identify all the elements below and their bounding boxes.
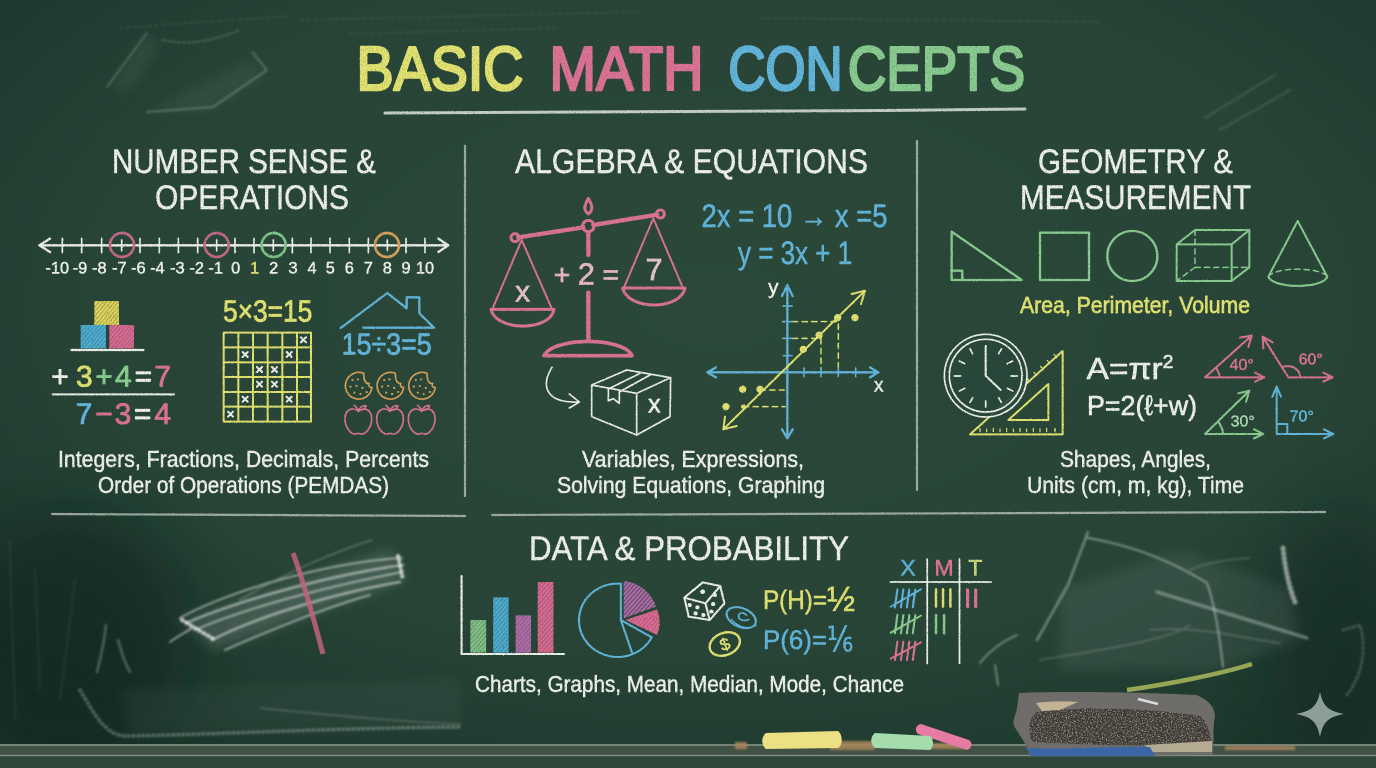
linear graph: y bbox=[768, 276, 779, 299]
probability formulas: ⅙ bbox=[827, 620, 853, 659]
divider lines bbox=[52, 141, 1325, 516]
number line: 4 bbox=[307, 259, 317, 277]
icon: balance scale: x bbox=[515, 276, 530, 309]
number line: 5 bbox=[326, 259, 335, 277]
pie chart bbox=[579, 581, 659, 657]
number line: 2 bbox=[269, 259, 278, 277]
heading: data: DATA & PROBABILITY bbox=[529, 530, 849, 568]
equation: addition: − bbox=[95, 398, 113, 431]
caption: number sense bbox=[58, 446, 429, 498]
icon: balance scale: 2 bbox=[578, 258, 595, 292]
caption: number sense: Order of Operations (PEMDAS) bbox=[98, 472, 389, 498]
panel: algebra and equations bbox=[491, 143, 888, 498]
angle diagrams: 30° bbox=[1231, 413, 1255, 430]
heading: number sense bbox=[112, 143, 376, 217]
number line: -2 bbox=[189, 259, 204, 277]
equation: addition: = bbox=[134, 398, 151, 431]
icon: balance scale: = bbox=[602, 260, 619, 292]
icon: clock and set square bbox=[944, 334, 1063, 434]
icon: stacked blocks bbox=[71, 301, 143, 350]
equations bbox=[702, 198, 888, 271]
number line: 7 bbox=[364, 259, 373, 277]
heading: geometry bbox=[1020, 143, 1251, 217]
equation: addition: 3 bbox=[115, 398, 131, 431]
yellow chalk bbox=[762, 731, 842, 749]
chalk sticks bbox=[762, 724, 971, 750]
division house and groups: 15÷3=5 bbox=[342, 327, 432, 361]
heading: number sense: OPERATIONS bbox=[155, 179, 349, 217]
caption: algebra: Solving Equations, Graphing bbox=[557, 472, 825, 498]
title: BASIC bbox=[356, 35, 524, 104]
washes bbox=[110, 35, 1300, 735]
formulas: 2 bbox=[1163, 352, 1174, 372]
heading: geometry: GEOMETRY & bbox=[1038, 143, 1233, 181]
panel: data and probability bbox=[462, 530, 991, 697]
probability formulas: P(6)= bbox=[763, 625, 827, 655]
chalk tray bbox=[0, 741, 1376, 768]
multiplication grid: 5×3=15 bbox=[223, 295, 312, 329]
number line: 0 bbox=[231, 259, 240, 277]
number line bbox=[39, 233, 448, 277]
equations: 2x = 10 → x =5 bbox=[702, 198, 888, 234]
heading: number sense: NUMBER SENSE & bbox=[112, 143, 376, 181]
icon: dice and coins: $ bbox=[717, 634, 733, 655]
number line: -9 bbox=[73, 259, 87, 277]
linear graph bbox=[707, 276, 884, 438]
shapes row bbox=[952, 221, 1327, 286]
number line: -3 bbox=[170, 259, 185, 277]
angle diagrams: 60° bbox=[1299, 352, 1323, 369]
panel: geometry and measurement bbox=[944, 143, 1333, 498]
icon: mystery box with arrow bbox=[546, 367, 671, 435]
caption: algebra: Variables, Expressions, bbox=[582, 446, 804, 472]
label: area perimeter volume: Area, Perimeter, Volume bbox=[1020, 292, 1250, 318]
tally table: X bbox=[900, 556, 916, 580]
green chalk bbox=[871, 733, 933, 750]
equation: addition: = bbox=[135, 361, 152, 394]
equation: addition: 7 bbox=[154, 361, 171, 394]
number line: 8 bbox=[383, 259, 392, 277]
angle diagrams: 40° bbox=[1230, 357, 1254, 374]
title bbox=[356, 35, 1025, 113]
probability formulas bbox=[763, 580, 855, 659]
title: MATH bbox=[550, 35, 704, 104]
angle diagrams bbox=[1205, 336, 1333, 438]
number line: -1 bbox=[208, 259, 223, 277]
equation: addition: 4 bbox=[115, 361, 132, 394]
number line: 9 bbox=[401, 259, 411, 277]
caption: geometry: Shapes, Angles, bbox=[1060, 446, 1211, 472]
number line: -7 bbox=[112, 259, 127, 277]
probability formulas: ½ bbox=[827, 580, 855, 619]
formulas: A=πr bbox=[1086, 351, 1157, 386]
caption: algebra bbox=[557, 446, 825, 498]
title: CEPTS bbox=[848, 35, 1025, 104]
icon: cookies bbox=[345, 372, 435, 399]
icon: house bbox=[341, 293, 434, 328]
icon: balance scale bbox=[491, 198, 685, 356]
caption: number sense: Integers, Fractions, Decimals, Percents bbox=[58, 446, 429, 472]
linear graph: x bbox=[874, 376, 884, 397]
number line: -10 bbox=[46, 259, 69, 277]
number line: 6 bbox=[345, 259, 354, 277]
multiplication grid bbox=[223, 295, 312, 422]
addition and subtraction blocks bbox=[51, 301, 174, 431]
probability formulas: P(H)= bbox=[763, 585, 827, 615]
icon: balance scale: + bbox=[554, 260, 570, 292]
number line: 1 bbox=[250, 259, 259, 277]
icon: sparkle watermark bbox=[1296, 692, 1344, 737]
eraser bbox=[1013, 692, 1215, 756]
caption: geometry bbox=[1027, 446, 1244, 498]
number line: -4 bbox=[150, 259, 165, 277]
number line: 3 bbox=[288, 259, 298, 277]
equation: addition: + bbox=[51, 361, 69, 394]
equations: y = 3x + 1 bbox=[738, 235, 852, 271]
equation: addition: + bbox=[95, 361, 113, 394]
caption: data: Charts, Graphs, Mean, Median, Mode, Chance bbox=[475, 671, 904, 697]
number line: -8 bbox=[92, 259, 107, 277]
angle diagrams: 70° bbox=[1290, 408, 1314, 425]
formulas: P=2(ℓ+w) bbox=[1087, 390, 1197, 421]
heading: geometry: MEASUREMENT bbox=[1020, 179, 1251, 217]
panel: number sense and operations bbox=[39, 143, 448, 498]
division house and groups bbox=[341, 293, 435, 434]
heading: algebra: ALGEBRA & EQUATIONS bbox=[515, 143, 868, 181]
equation: addition: 3 bbox=[76, 361, 93, 394]
tally table: T bbox=[968, 556, 983, 580]
chalk dust bbox=[735, 741, 1295, 750]
tally table bbox=[890, 556, 991, 663]
icon: apples bbox=[345, 405, 435, 434]
icon: dice and coins bbox=[684, 582, 759, 660]
equation: addition: 7 bbox=[76, 398, 92, 431]
number line: -6 bbox=[131, 259, 146, 277]
tally table: M bbox=[934, 556, 954, 580]
formulas bbox=[1086, 351, 1197, 421]
bar chart bbox=[462, 576, 564, 654]
icon: mystery box with arrow: x bbox=[648, 391, 661, 419]
icon: balance scale: 7 bbox=[645, 253, 663, 287]
equation: addition bbox=[51, 361, 174, 431]
pink chalk bbox=[916, 724, 971, 750]
number line: 10 bbox=[416, 259, 434, 277]
title: CON bbox=[728, 35, 842, 104]
equation: addition: 4 bbox=[154, 398, 171, 431]
caption: geometry: Units (cm, m, kg), Time bbox=[1027, 472, 1244, 498]
